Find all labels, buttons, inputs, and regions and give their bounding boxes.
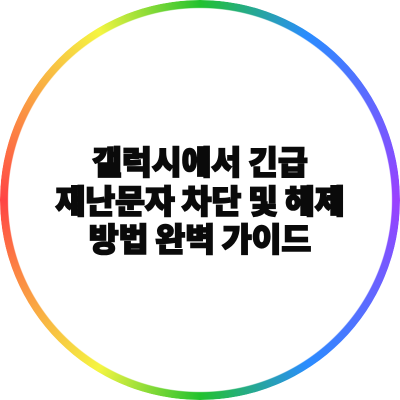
title: 재난문자 차단 및 해제 xyxy=(56,184,344,220)
title xyxy=(54,145,344,258)
title: 갤럭시에서 긴급 xyxy=(92,145,308,181)
title: 방법 완벽 가이드 xyxy=(89,222,311,258)
